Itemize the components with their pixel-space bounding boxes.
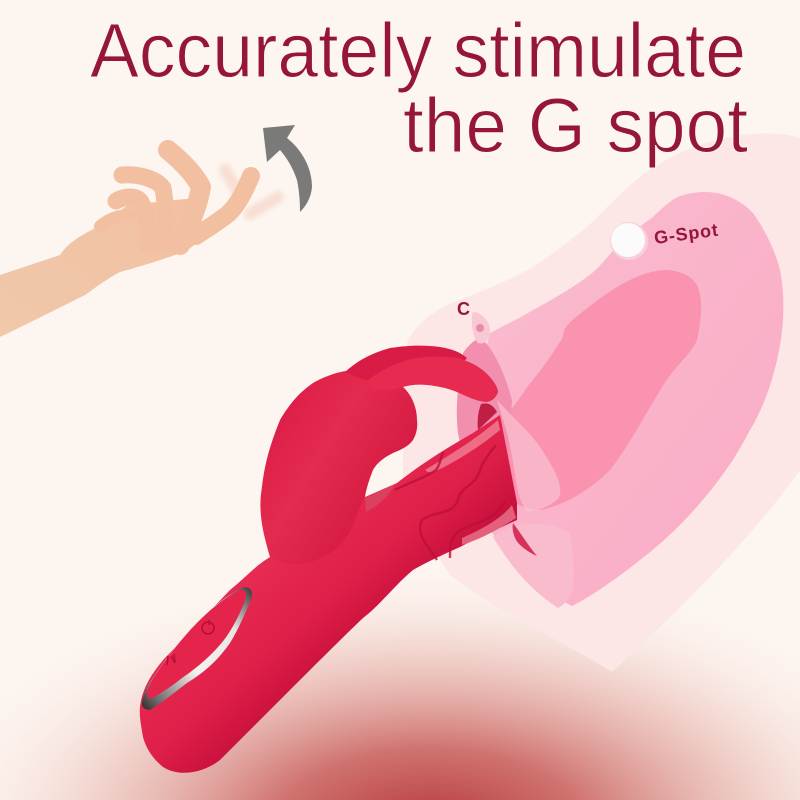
arrow: curved gesture arrow xyxy=(263,125,312,212)
label: C: C xyxy=(457,299,470,319)
illustration: translucent front fold xyxy=(497,400,560,512)
control panel xyxy=(142,587,252,710)
illustration: lower funnel xyxy=(493,524,574,608)
marker: G-spot ball xyxy=(610,222,648,260)
product: front ear xyxy=(367,357,498,402)
product: rabbit arm xyxy=(260,370,417,564)
product: shaft tip highlights xyxy=(365,420,516,545)
metal ring xyxy=(142,587,252,710)
illustration: left fold xyxy=(457,337,512,520)
label: G-Spot: G-Spot xyxy=(653,220,719,248)
thumb and fingers xyxy=(100,150,251,245)
motion blur fingers xyxy=(225,170,278,214)
illustration: dark recess xyxy=(478,403,497,430)
palm and arm xyxy=(0,198,203,337)
product: raised ridges xyxy=(395,445,505,560)
title: Accurately stimulate xyxy=(90,8,746,94)
illustration: rounded internal form xyxy=(470,270,701,510)
icon: mode button xyxy=(167,654,175,665)
product: shaft and handle xyxy=(140,415,517,773)
title xyxy=(90,8,748,169)
illustration: lower streak xyxy=(513,523,537,556)
panel face xyxy=(147,590,246,699)
panel: anatomy inner shape xyxy=(475,192,783,606)
icon: hand xyxy=(0,150,278,337)
icon: power button xyxy=(202,620,214,634)
panel: anatomy outer silhouette xyxy=(403,133,800,672)
product: rear ear xyxy=(345,346,467,384)
title: the G spot xyxy=(403,83,748,169)
marker: C point xyxy=(472,312,490,343)
